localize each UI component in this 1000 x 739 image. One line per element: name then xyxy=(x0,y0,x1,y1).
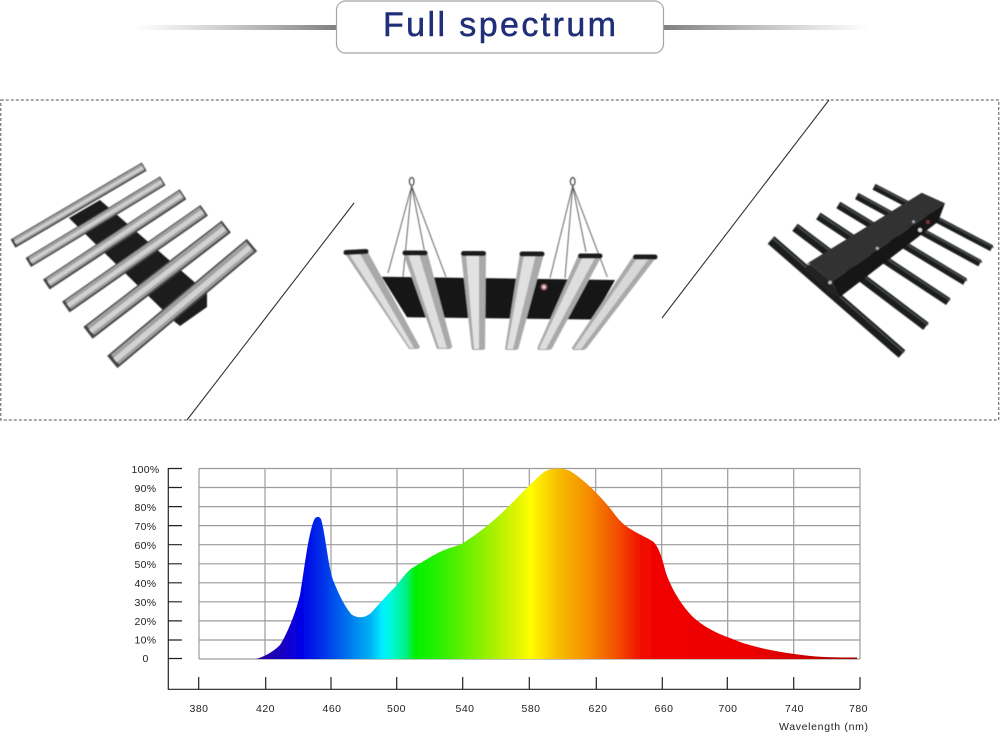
axes xyxy=(168,468,860,689)
y axis labels: 10% xyxy=(134,634,156,646)
spectrum chart xyxy=(132,464,868,733)
chart grid xyxy=(199,468,860,659)
y axis labels: 40% xyxy=(134,578,156,590)
black driver panel xyxy=(382,277,615,320)
x axis labels xyxy=(189,703,868,715)
x axis labels: 580 xyxy=(521,703,541,715)
suspension wires left xyxy=(388,178,446,277)
x axis labels: 700 xyxy=(718,703,738,715)
x axis labels: 620 xyxy=(588,703,608,715)
spectrum area curve xyxy=(256,468,857,659)
suspension wires right xyxy=(550,178,607,278)
title text: Full spectrum xyxy=(383,6,616,44)
y axis labels: 20% xyxy=(134,616,156,628)
x axis labels: 420 xyxy=(256,703,275,715)
x axis title: Wavelength (nm) xyxy=(779,721,868,733)
fixture: underside view left xyxy=(13,167,252,362)
x axis labels: 740 xyxy=(785,703,804,715)
fixture: hanging front view centre xyxy=(344,178,657,350)
x axis labels: 540 xyxy=(455,703,475,715)
title connector line right xyxy=(664,25,870,30)
dashed product panel xyxy=(1,100,999,420)
y axis labels: 30% xyxy=(134,597,156,609)
title box xyxy=(336,1,664,53)
x axis labels: 380 xyxy=(189,703,209,715)
y axis labels xyxy=(132,464,160,665)
x axis labels: 660 xyxy=(654,703,674,715)
screws and controls xyxy=(807,220,930,284)
diagonal divider right xyxy=(662,100,829,318)
y axis labels: 80% xyxy=(134,502,156,514)
y axis labels: 50% xyxy=(134,559,156,571)
y axis labels: 100% xyxy=(132,464,160,476)
driver box xyxy=(808,193,945,282)
y axis labels: 0 xyxy=(142,653,149,665)
light bars xyxy=(344,250,657,350)
x axis labels: 780 xyxy=(849,703,868,715)
y axis labels: 90% xyxy=(134,483,156,495)
title connector line left xyxy=(135,25,336,30)
fixture: back view right xyxy=(771,186,994,354)
diagonal divider left xyxy=(187,203,354,420)
x axis labels: 460 xyxy=(322,703,342,715)
x axis labels: 500 xyxy=(387,703,406,715)
y axis labels: 70% xyxy=(134,521,156,533)
y axis labels: 60% xyxy=(134,540,156,552)
